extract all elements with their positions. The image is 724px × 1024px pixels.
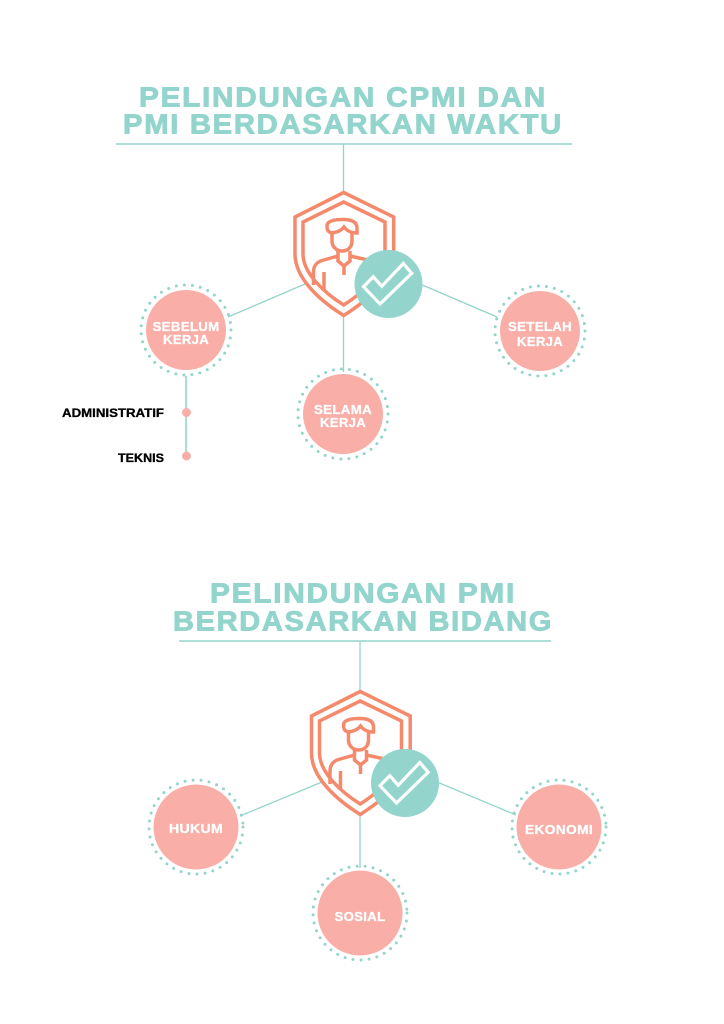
node: sosial	[313, 866, 407, 960]
title: protection by sector	[173, 578, 553, 636]
title: protection by time: PMI BERDASARKAN WAKTU	[123, 108, 563, 140]
node: hukum	[149, 780, 243, 874]
icon: shield with worker and check, top	[295, 192, 422, 318]
node: selama kerja	[298, 369, 388, 459]
node: sebelum kerja: KERJA	[163, 333, 209, 347]
title: protection by sector: BERDASARKAN BIDANG	[173, 606, 553, 636]
node: setelah kerja	[495, 286, 585, 376]
node: sebelum kerja	[141, 285, 231, 375]
node: selama kerja: KERJA	[320, 416, 366, 430]
sub-item: administratif: ADMINISTRATIF	[62, 406, 164, 420]
node: setelah kerja: SETELAH	[508, 320, 572, 334]
node: sosial: SOSIAL	[334, 910, 386, 924]
title: protection by sector: PELINDUNGAN PMI	[210, 578, 516, 608]
connector lines: top diagram	[116, 144, 572, 456]
sub-item: teknis: TEKNIS	[118, 451, 164, 465]
title: protection by time: PELINDUNGAN CPMI DAN	[139, 82, 547, 112]
sub-item: teknis	[118, 451, 191, 465]
node: ekonomi: EKONOMI	[525, 823, 593, 837]
node: setelah kerja: KERJA	[517, 335, 563, 349]
node: ekonomi	[512, 780, 606, 874]
icon: check mark	[364, 264, 412, 304]
connector lines: bottom diagram	[179, 641, 551, 868]
title: protection by time	[123, 82, 563, 140]
node: hukum: HUKUM	[169, 822, 223, 836]
node: sebelum kerja: SEBELUM	[152, 320, 220, 334]
node: selama kerja: SELAMA	[314, 403, 372, 417]
icon: check mark	[380, 762, 428, 803]
icon: shield with worker and check, bottom	[312, 692, 439, 817]
